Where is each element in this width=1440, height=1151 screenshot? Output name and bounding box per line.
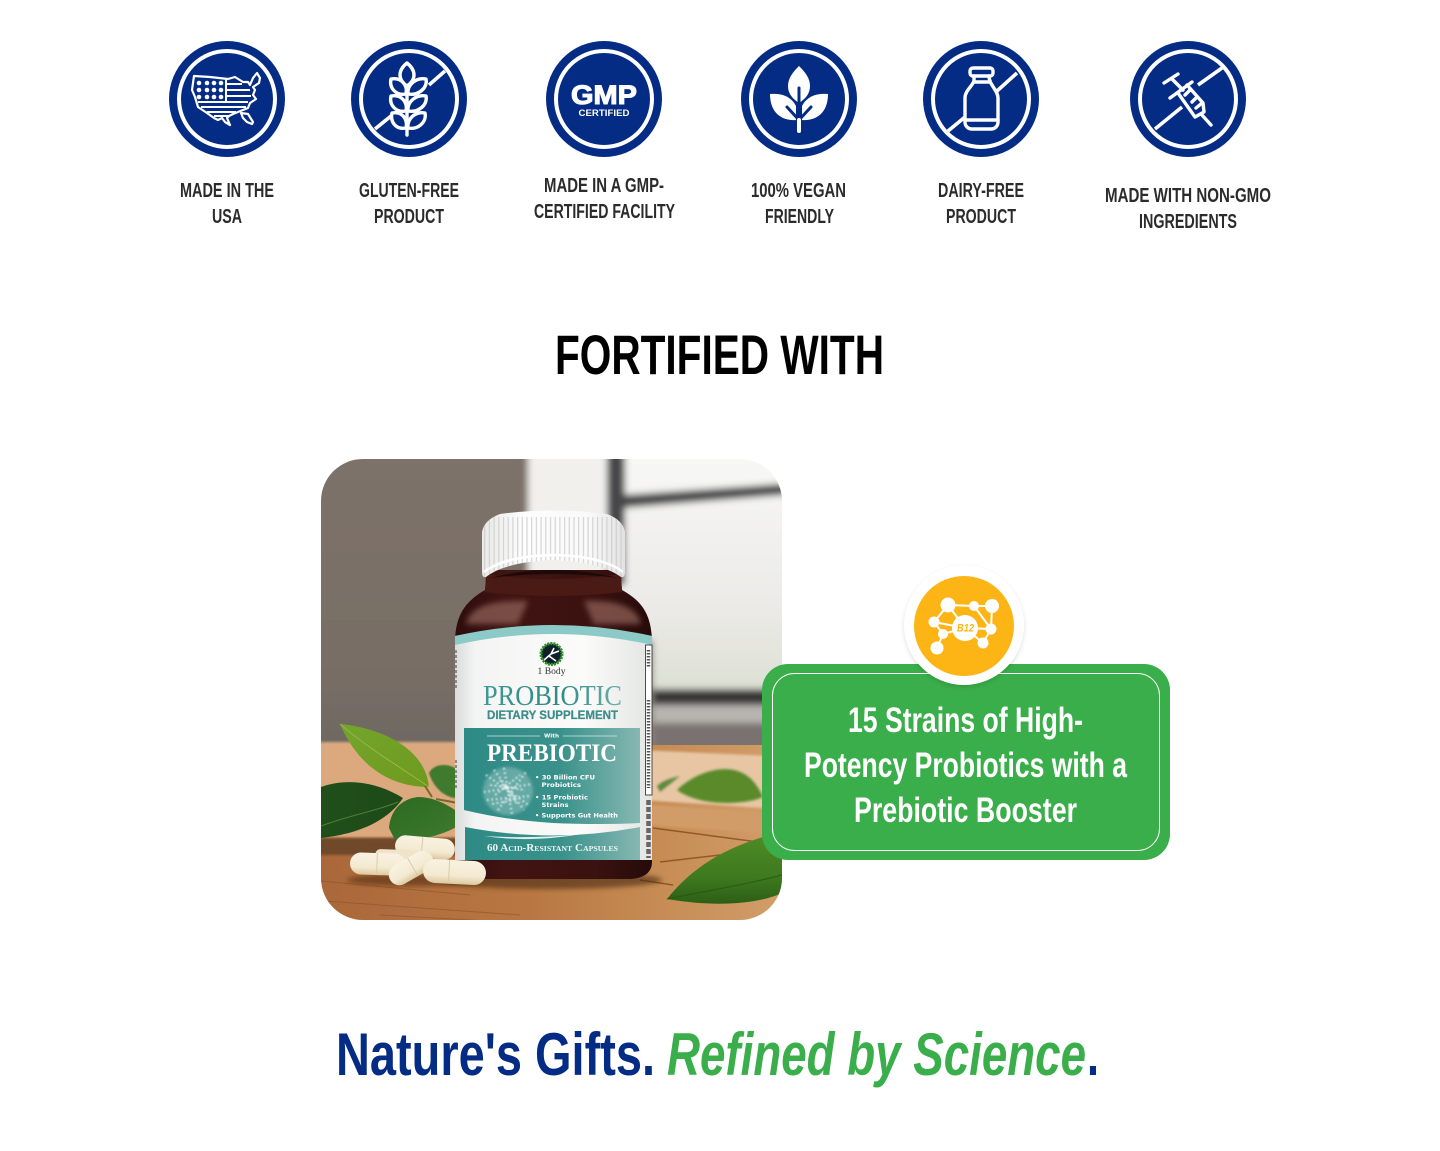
bottle xyxy=(455,510,652,879)
product photo xyxy=(310,450,795,930)
label xyxy=(359,180,459,228)
icon group: dairy free xyxy=(923,41,1039,228)
callout text: Potency Probiotics with a xyxy=(804,746,1127,785)
icon: GMP certified badge xyxy=(546,41,662,157)
label: 100% VEGAN xyxy=(751,180,846,202)
icon: vegan sprout xyxy=(741,41,857,157)
label: CERTIFIED FACILITY xyxy=(534,201,675,223)
callout text: Prebiotic Booster xyxy=(854,791,1077,830)
label: INGREDIENTS xyxy=(1139,211,1237,233)
icon: USA flag map xyxy=(169,41,285,157)
icon: crossed milk bottle xyxy=(923,41,1039,157)
icon: GMP certified badge: CERTIFIED xyxy=(578,108,630,119)
label: DIETARY SUPPLEMENT xyxy=(487,708,619,722)
label: DAIRY-FREE xyxy=(938,180,1024,202)
label: USA xyxy=(212,206,242,228)
icon group: non-GMO xyxy=(1105,41,1271,233)
wooden table xyxy=(310,742,795,930)
icon: GMP certified badge: GMP xyxy=(571,80,637,110)
label: • 30 Billion CFU xyxy=(535,774,595,782)
powder burst xyxy=(483,767,533,815)
label: PRODUCT xyxy=(374,206,444,228)
icon group: GMP xyxy=(534,41,675,223)
capsules xyxy=(347,834,487,889)
tagline xyxy=(336,1021,1099,1088)
bottle cap xyxy=(482,510,625,577)
tagline: . xyxy=(1087,1021,1099,1088)
brand logo xyxy=(541,644,562,664)
label: PRODUCT xyxy=(946,206,1016,228)
label xyxy=(455,625,652,860)
leaves xyxy=(321,724,782,904)
tagline: Nature's Gifts. xyxy=(336,1021,655,1088)
label xyxy=(938,180,1024,228)
icon: crossed wheat xyxy=(351,41,467,157)
label xyxy=(534,175,675,223)
icon group: vegan xyxy=(741,41,857,228)
callout text xyxy=(804,701,1127,830)
label: 60 Acid-Resistant Capsules xyxy=(487,843,618,854)
label: Strains xyxy=(542,801,569,809)
room background xyxy=(321,459,782,745)
label text: 1 Body xyxy=(538,666,566,676)
icon group: gluten free xyxy=(351,41,467,228)
lower teal band xyxy=(465,827,640,860)
label: FRIENDLY xyxy=(765,206,834,228)
icon: B12 molecule badge xyxy=(904,565,1024,687)
label: Probiotics xyxy=(542,781,581,789)
label: With xyxy=(544,734,559,740)
label: • Supports Gut Health xyxy=(535,812,618,820)
label: PROBIOTIC xyxy=(483,680,622,712)
label: • 15 Probiotic xyxy=(535,794,588,802)
icon: crossed syringe xyxy=(1130,41,1246,157)
label: MADE IN A GMP- xyxy=(544,175,664,197)
icon: B12 molecule badge: B12 xyxy=(957,622,974,634)
label xyxy=(751,180,846,228)
tagline: Refined by Science xyxy=(667,1021,1086,1088)
label: MADE WITH NON-GMO xyxy=(1105,185,1271,207)
callout text: 15 Strains of High- xyxy=(848,701,1083,740)
label: PREBIOTIC xyxy=(487,740,617,767)
label: MADE IN THE xyxy=(180,180,274,202)
bottle shadow xyxy=(438,871,662,889)
heading: fortified with: FORTIFIED WITH xyxy=(555,323,884,386)
teal panel xyxy=(464,728,640,824)
label xyxy=(1105,185,1271,233)
icon group: made in the USA xyxy=(169,41,285,228)
label: GLUTEN-FREE xyxy=(359,180,459,202)
callout: green benefit box xyxy=(762,664,1170,860)
label xyxy=(180,180,274,228)
